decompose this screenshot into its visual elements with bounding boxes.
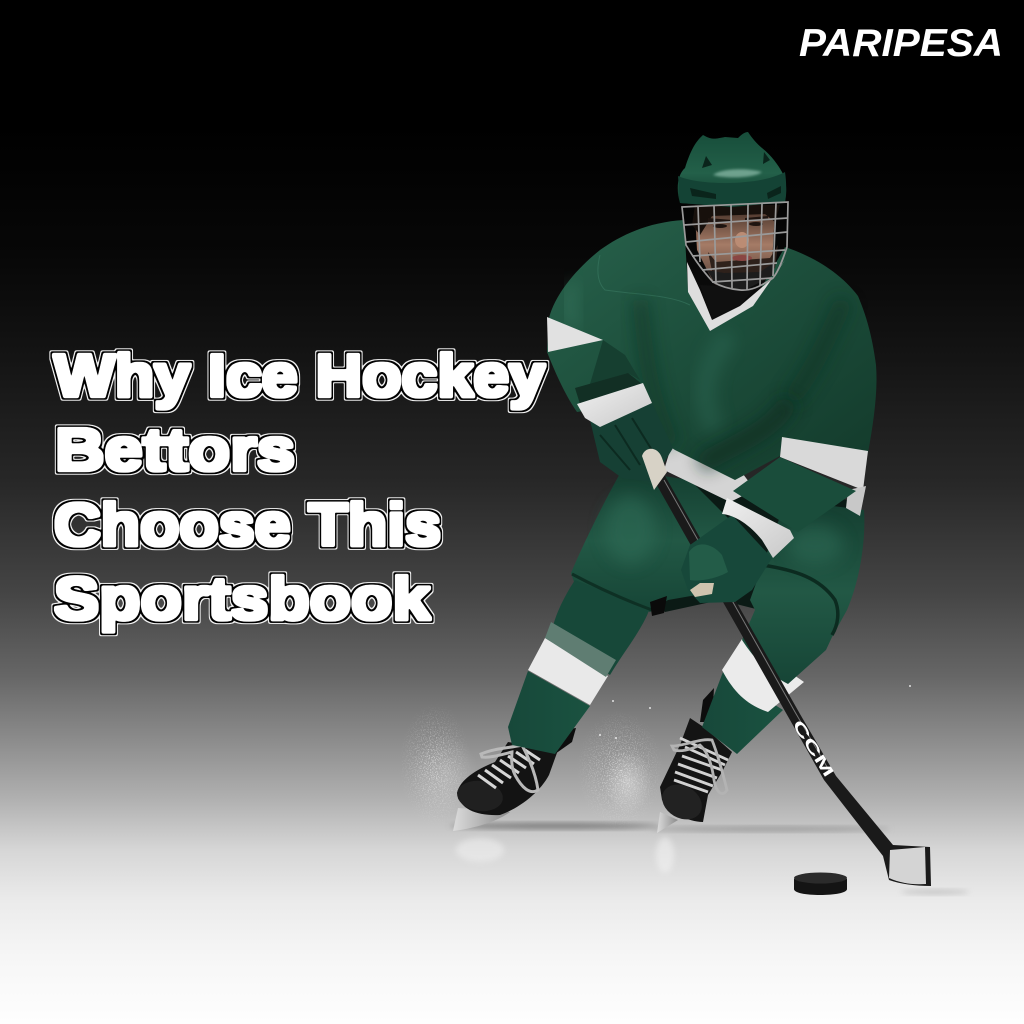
upper glove [590,403,673,482]
right forearm [733,457,856,532]
left leg [453,470,730,831]
glove palm detail [690,583,714,597]
lower cuff [722,498,794,558]
right lower sock [702,672,783,754]
title: Bettors [55,417,295,483]
dark under layer between legs [640,480,850,612]
left skate [453,728,576,831]
right thigh pants [742,500,864,684]
title: Choose This [54,492,441,558]
helmet vents [690,152,781,199]
ice spray [399,685,911,830]
lower glove [681,515,772,603]
ice shadows and reflections [450,823,969,894]
left gauntlet [575,373,642,404]
head and helmet [678,132,788,290]
left sock grey stripe [545,622,616,677]
face cage [682,202,788,290]
right sock white band [722,639,804,712]
right leg [656,500,864,833]
logo: Paripesa: PARIPESA [799,22,1003,65]
jersey hem [664,444,755,502]
right pants hem [762,565,838,635]
eyes [708,216,768,228]
left cuff [577,383,652,427]
mouth guard [707,262,775,290]
left thigh pants [571,470,730,612]
glove thumb [689,544,728,581]
right sleeve white band [780,437,868,490]
right skate [656,688,732,833]
jersey body [547,220,877,480]
title: Why Ice Hockey [54,343,545,409]
collar [687,260,785,331]
left inner arm shadow [590,340,640,384]
hockey stick [642,449,931,886]
stick brand: CCM [789,717,837,780]
left thigh highlight [604,496,656,564]
left sock white band [528,638,608,705]
jersey folds [569,255,845,465]
mouth [732,255,752,261]
hockey puck [794,872,847,895]
helmet highlight [713,169,762,177]
stick blade tape [889,847,926,884]
left knee [551,580,650,675]
right thigh highlight [787,525,843,565]
helmet brim [678,172,786,207]
face [695,210,775,287]
left back-of-knee pad [650,596,667,616]
nose [735,232,749,248]
left sleeve white band [547,317,603,352]
title [54,343,545,632]
hockey player [453,132,931,886]
hair [692,205,780,235]
jersey side hem [846,486,866,516]
beard [708,245,778,290]
undershirt neck [700,285,755,318]
stick tape grip [642,449,667,490]
title: Sportsbook [54,566,430,632]
left pants hem [572,574,652,610]
helmet shell [678,132,786,207]
left lower sock [508,671,590,754]
